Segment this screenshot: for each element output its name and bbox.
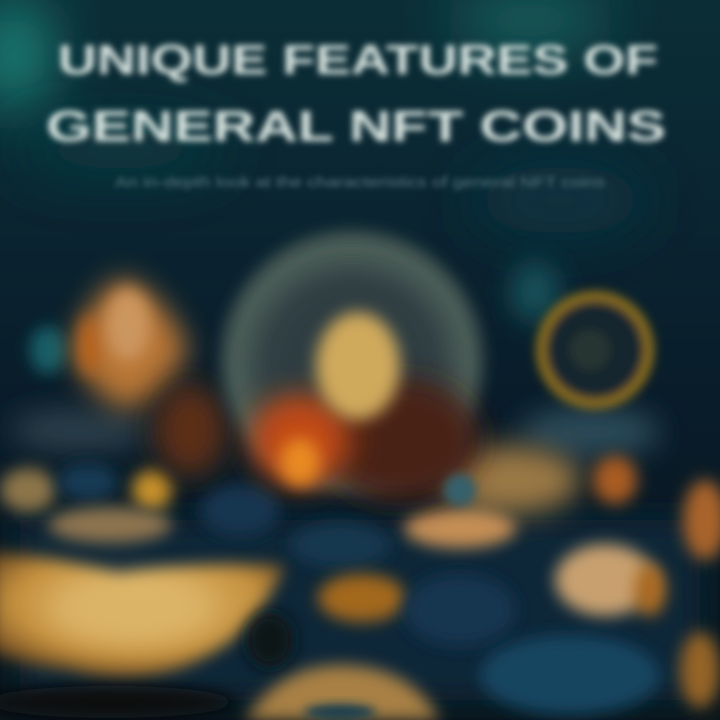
title: UNIQUE FEATURES OF [58,36,658,83]
icon: gem highlights [80,289,150,375]
pile front layer [0,474,720,720]
icon: teal glow left [30,326,66,374]
subtitle: An in-depth look at the characteristics of general NFT coins [115,174,605,191]
title [46,36,666,151]
icon: gold ring [541,296,649,404]
icon: teal glow right [511,262,559,322]
title: GENERAL NFT COINS [46,102,666,151]
central circular coin [222,232,482,502]
pile back layer [0,406,720,700]
icon: gold gem left [72,278,188,410]
icon: brown shard [154,384,226,476]
